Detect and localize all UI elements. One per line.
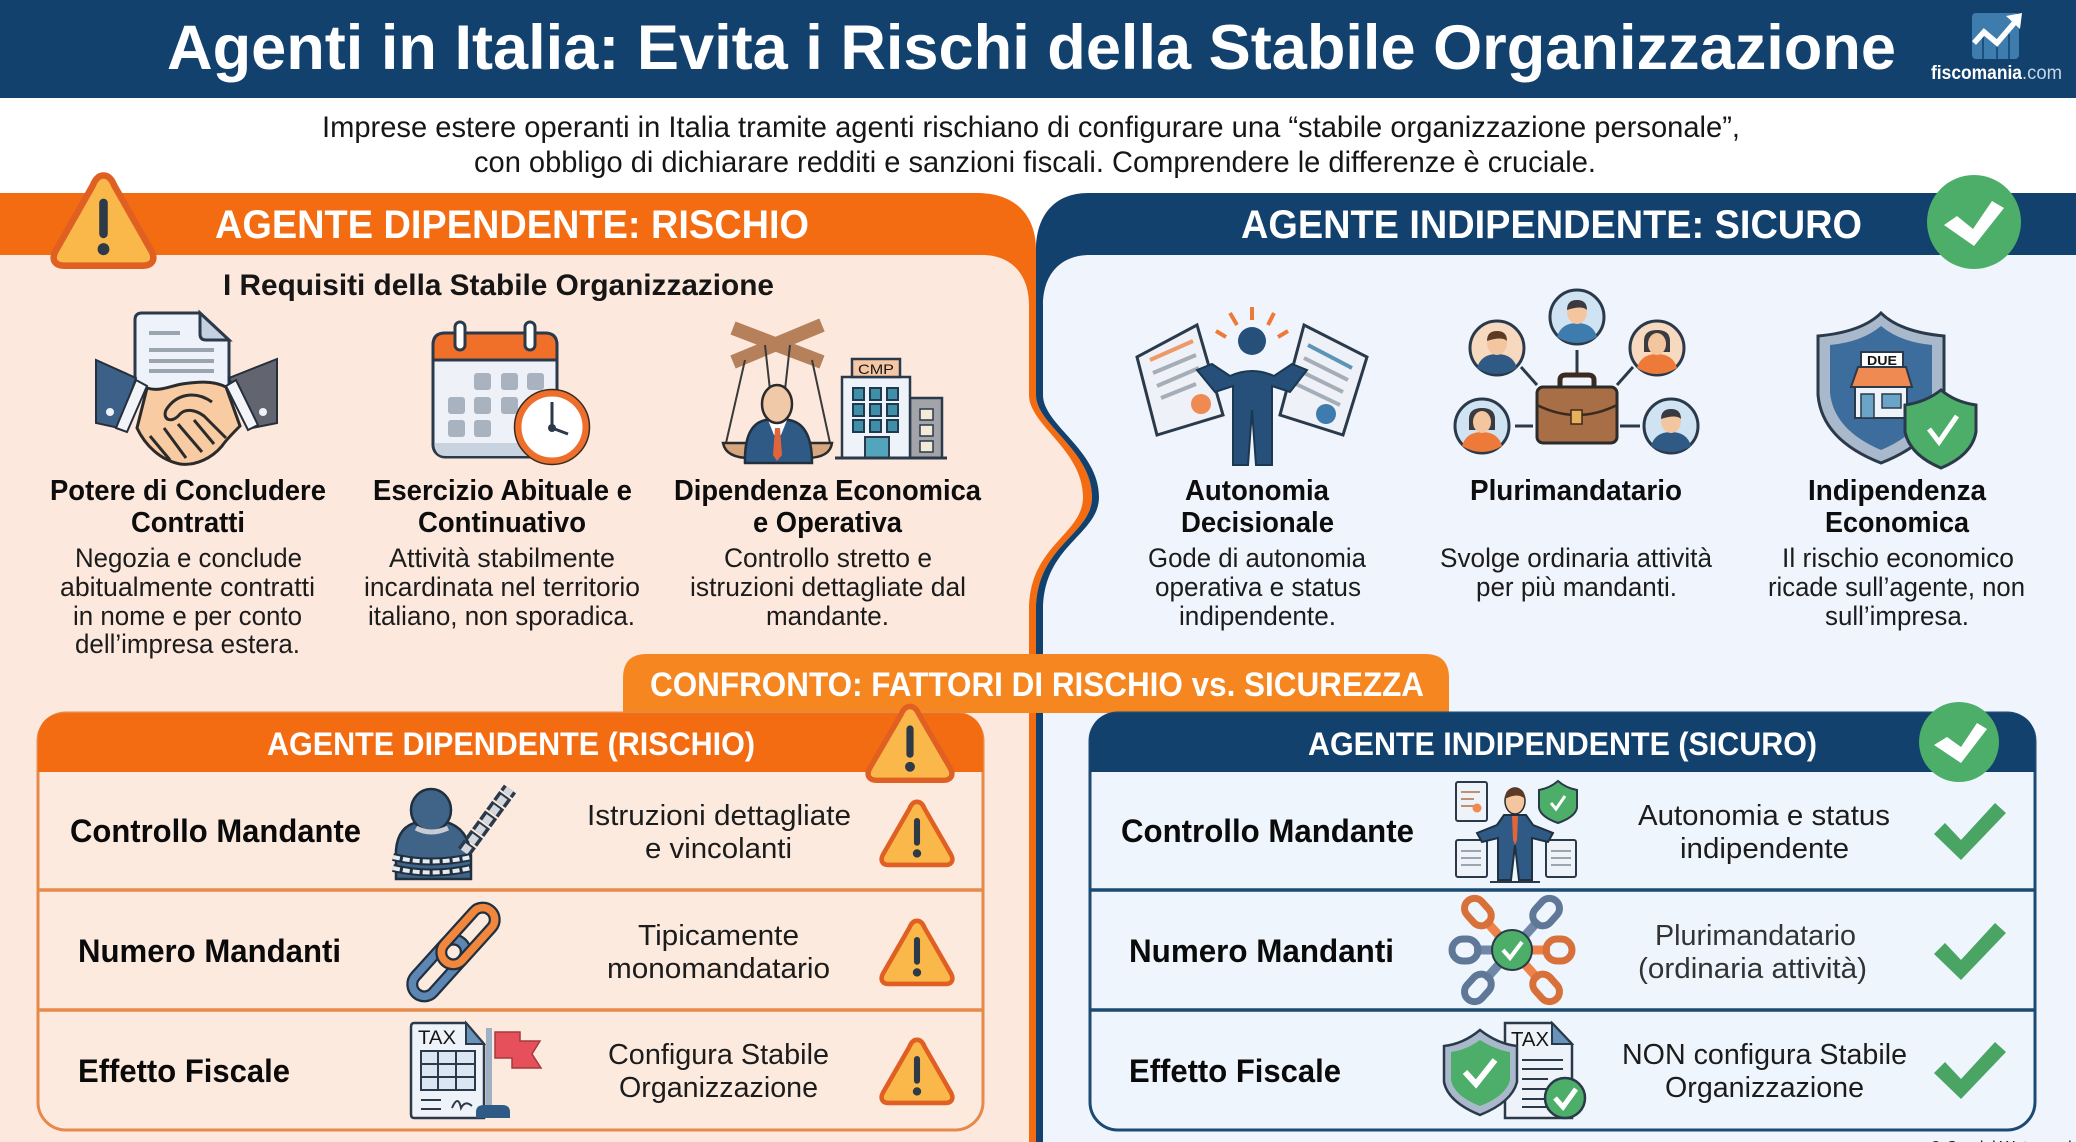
feature: autonomia decisionale: Gode di autonomia [1148,543,1367,573]
row labels: indipendente [1121,813,1414,1089]
requirement: dipendenza economica: istruzioni dettagliate dal [690,572,966,602]
feature: plurimandatario: per più mandanti. [1476,572,1677,602]
icon: puppet on strings and company building [723,325,947,463]
icon: handshake and contract [96,313,277,464]
feature: plurimandatario: Plurimandatario [1470,475,1682,507]
row values: indipendente [1622,800,1907,1104]
requirement: potere di concludere contratti: Potere di Concludere [50,475,326,507]
feature: autonomia decisionale [1148,475,1367,631]
table: agente dipendente rischio [38,713,983,1130]
icon: briefcase with five clients [1455,290,1698,453]
requirement: potere di concludere contratti: dell’impresa estera. [75,629,300,659]
icon: shield with shop: DUE [1867,353,1897,368]
table header label: dipendente: AGENTE DIPENDENTE (RISCHIO) [267,726,755,762]
requirement: esercizio abituale: Esercizio Abituale e [373,475,632,507]
requirement: potere di concludere contratti [50,475,326,659]
logo: fiscomania: .com [2022,63,2062,84]
comparison banner [623,654,1449,713]
row labels: indipendente: Effetto Fiscale [1129,1053,1341,1089]
row values: dipendente: monomandatario [607,953,830,985]
subtitle: Imprese estere operanti in Italia tramite agenti rischiano di configurare una “stabile organizzazione personale”, [322,111,1740,144]
icon: green check row 3 [1934,1042,2006,1099]
requirement: dipendenza economica: e Operativa [753,507,903,539]
icon: large green check badge [1927,175,2021,269]
requirement: esercizio abituale: italiano, non sporadica. [368,601,635,631]
requirement: esercizio abituale: Continuativo [418,507,586,539]
icon: header warning triangle [868,706,952,780]
icon: shield with shop [1818,313,1976,468]
row values: indipendente: NON configura Stabile [1622,1039,1907,1071]
table header: dipendente [38,713,983,772]
requirement: esercizio abituale [364,475,640,631]
row values: dipendente: e vincolanti [645,833,792,865]
icon: tax document with red flag [411,1023,541,1118]
icon: warning row 3 [882,1040,952,1103]
icon: chained figure [393,789,510,879]
feature: plurimandatario [1440,475,1713,602]
row labels: dipendente: Controllo Mandante [70,813,361,849]
feature: indipendenza economica: Economica [1825,507,1970,539]
row values: indipendente: (ordinaria attività) [1638,953,1867,985]
icon: chain network with check [1452,894,1572,1006]
row values: dipendente: Tipicamente [638,920,799,952]
requirement: dipendenza economica: Controllo stretto e [724,543,932,573]
heading: requisiti: I Requisiti della Stabile Organizzazione [223,269,774,302]
icon: calendar and clock [433,322,590,464]
row values: indipendente: Plurimandatario [1655,920,1856,952]
requirement: potere di concludere contratti: abitualmente contratti [60,572,315,602]
header band [0,0,2076,98]
subtitle [322,111,1740,179]
row labels: dipendente: Numero Mandanti [78,933,341,969]
requirement: dipendenza economica [674,475,982,631]
feature: indipendenza economica: Il rischio economico [1782,543,2014,573]
heading: agente indipendente sicuro: AGENTE INDIPENDENTE: SICURO [1241,203,1862,247]
icon: large warning triangle [54,176,153,266]
row values: dipendente: Configura Stabile [608,1039,829,1071]
icon: independent person with documents [1137,307,1367,465]
requirement: potere di concludere contratti: in nome e per conto [73,601,302,631]
row values: dipendente [587,800,851,1104]
icon: puppet on strings and company building: CMP [858,361,894,377]
icon: green check row 1 [1934,803,2006,860]
feature: autonomia decisionale: Decisionale [1181,507,1334,539]
icon: shield and tax document [1444,1023,1585,1118]
feature: indipendenza economica: ricade sull’agente, non [1768,572,2025,602]
feature: autonomia decisionale: operativa e status [1155,572,1361,602]
icon: businessman with documents and shield [1456,781,1577,882]
requirement: dipendenza economica: Dipendenza Economica [674,475,982,507]
title: Agenti in Italia: Evita i Rischi della Stabile Organizzazione [167,13,1896,83]
row labels: dipendente [70,813,361,1089]
feature: indipendenza economica: sull’impresa. [1825,601,1969,631]
table header: indipendente [1090,713,2035,772]
table: agente indipendente sicuro [1090,713,2035,1130]
requirement: potere di concludere contratti: Contratti [131,507,245,539]
icon: warning row 1 [882,802,952,865]
heading: agente dipendente rischio: AGENTE DIPENDENTE: RISCHIO [215,203,809,247]
row labels: indipendente: Controllo Mandante [1121,813,1414,849]
requirement: esercizio abituale: incardinata nel territorio [364,572,640,602]
feature: indipendenza economica [1768,475,2025,631]
feature: indipendenza economica: Indipendenza [1808,475,1987,507]
row values: dipendente: Istruzioni dettagliate [587,800,851,832]
feature: plurimandatario: Svolge ordinaria attività [1440,543,1713,573]
panel: agente dipendente [0,193,1092,1142]
icon: warning row 2 [882,921,952,984]
logo: fiscomania: fiscomania [1931,63,2022,84]
row values: indipendente: Organizzazione [1665,1072,1864,1104]
row values: indipendente: Autonomia e status [1638,800,1890,832]
icon: shield and tax document: TAX [1511,1029,1549,1051]
requirement: esercizio abituale: Attività stabilmente [389,543,615,573]
feature: autonomia decisionale: indipendente. [1179,601,1336,631]
row labels: indipendente: Numero Mandanti [1129,933,1394,969]
icon: green check row 2 [1934,923,2006,980]
requirement: potere di concludere contratti: Negozia e conclude [75,543,302,573]
icon: two interlocking chain links [407,903,500,1001]
row labels: dipendente: Effetto Fiscale [78,1053,290,1089]
logo: fiscomania [1931,13,2062,84]
row values: dipendente: Organizzazione [619,1072,818,1104]
row values: indipendente: indipendente [1680,833,1849,865]
comparison banner: CONFRONTO: FATTORI DI RISCHIO vs. SICUREZZA [650,666,1424,704]
feature: autonomia decisionale: Autonomia [1185,475,1330,507]
table header label: indipendente: AGENTE INDIPENDENTE (SICURO) [1308,726,1817,762]
icon: header check badge [1919,702,1999,782]
requirement: dipendenza economica: mandante. [766,601,889,631]
panel: agente indipendente [1036,193,2076,1142]
icon: tax document with red flag: TAX [418,1028,456,1049]
subtitle: con obbligo di dichiarare redditi e sanzioni fiscali. Comprendere le differenze è cruciale. [474,146,1596,179]
